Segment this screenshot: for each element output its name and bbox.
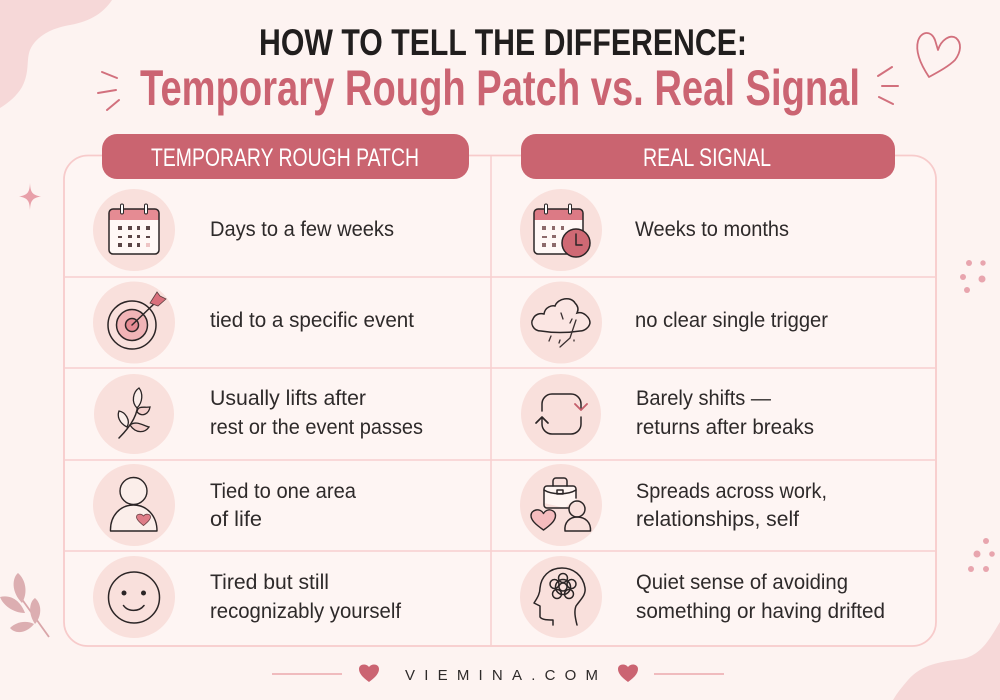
- decorative leaf sprig: bottom left: [0, 573, 49, 637]
- row 4 left: icon person with heart: [93, 464, 175, 546]
- row 1 left: text: Days to a few weeks: [210, 218, 394, 241]
- row 5 right: icon head with flower: [520, 556, 602, 638]
- footer: VIEMINA.COM: [405, 667, 598, 684]
- row 4 right: text: Spreads across work,: [636, 480, 827, 503]
- column header: temporary rough patch: [102, 134, 469, 179]
- row 4 left: text: [210, 480, 356, 531]
- row 3 right: text: returns after breaks: [636, 416, 814, 439]
- icon: sparkle: [19, 183, 41, 210]
- row 5 left: icon smiley: [93, 556, 175, 638]
- icon: outlined heart: [917, 33, 960, 77]
- row 1 right: text: Weeks to months: [635, 218, 789, 241]
- row 1 left: icon calendar: [93, 189, 175, 271]
- decorative dots: upper right: [960, 260, 986, 293]
- accent rays: left of title: [98, 72, 119, 110]
- row 3 right: text: [636, 387, 814, 439]
- row 3 left: icon leaf branch: [94, 374, 174, 454]
- row 5 left: text: [210, 571, 401, 623]
- row 5 right: text: Quiet sense of avoiding: [636, 571, 848, 594]
- row 5 right: text: [636, 571, 885, 623]
- row 2 left: text: tied to a specific event: [210, 309, 414, 332]
- column header: real signal: REAL SIGNAL: [643, 144, 771, 172]
- table grid lines: [64, 156, 936, 646]
- comparison table frame: [64, 156, 936, 646]
- row 5 right: text: something or having drifted: [636, 600, 885, 623]
- row 3 left: text: Usually lifts after: [210, 387, 366, 410]
- row 2 right: text: no clear single trigger: [635, 309, 828, 332]
- row 1 right: icon calendar with clock: [520, 189, 602, 271]
- row 5 left: text: recognizably yourself: [210, 600, 401, 623]
- row 4 right: icon briefcase heart and person: [520, 464, 602, 546]
- column header: temporary rough patch: TEMPORARY ROUGH PATCH: [151, 144, 419, 172]
- row 2 left: icon target: [93, 282, 175, 364]
- row 3 left: text: rest or the event passes: [210, 416, 423, 439]
- row 5 left: text: Tired but still: [210, 571, 329, 594]
- decorative blob: top left: [0, 0, 112, 108]
- row 4 left: text: Tied to one area: [210, 480, 356, 503]
- footer: [272, 665, 724, 684]
- accent rays: right of title: [878, 67, 898, 104]
- row 4 right: text: [636, 480, 827, 531]
- row 3 right: text: Barely shifts —: [636, 387, 771, 410]
- decorative dots: lower right: [968, 538, 995, 572]
- title: first line: HOW TO TELL THE DIFFERENCE:: [259, 22, 747, 63]
- row 3 right: icon cycle arrows: [521, 374, 601, 454]
- column header: real signal: [521, 134, 895, 179]
- row 4 right: text: relationships, self: [636, 508, 799, 531]
- row 2 right: icon storm cloud: [520, 282, 602, 364]
- row 3 left: text: [210, 387, 423, 439]
- row 4 left: text: of life: [210, 508, 262, 531]
- decorative blob: bottom right: [893, 622, 1000, 700]
